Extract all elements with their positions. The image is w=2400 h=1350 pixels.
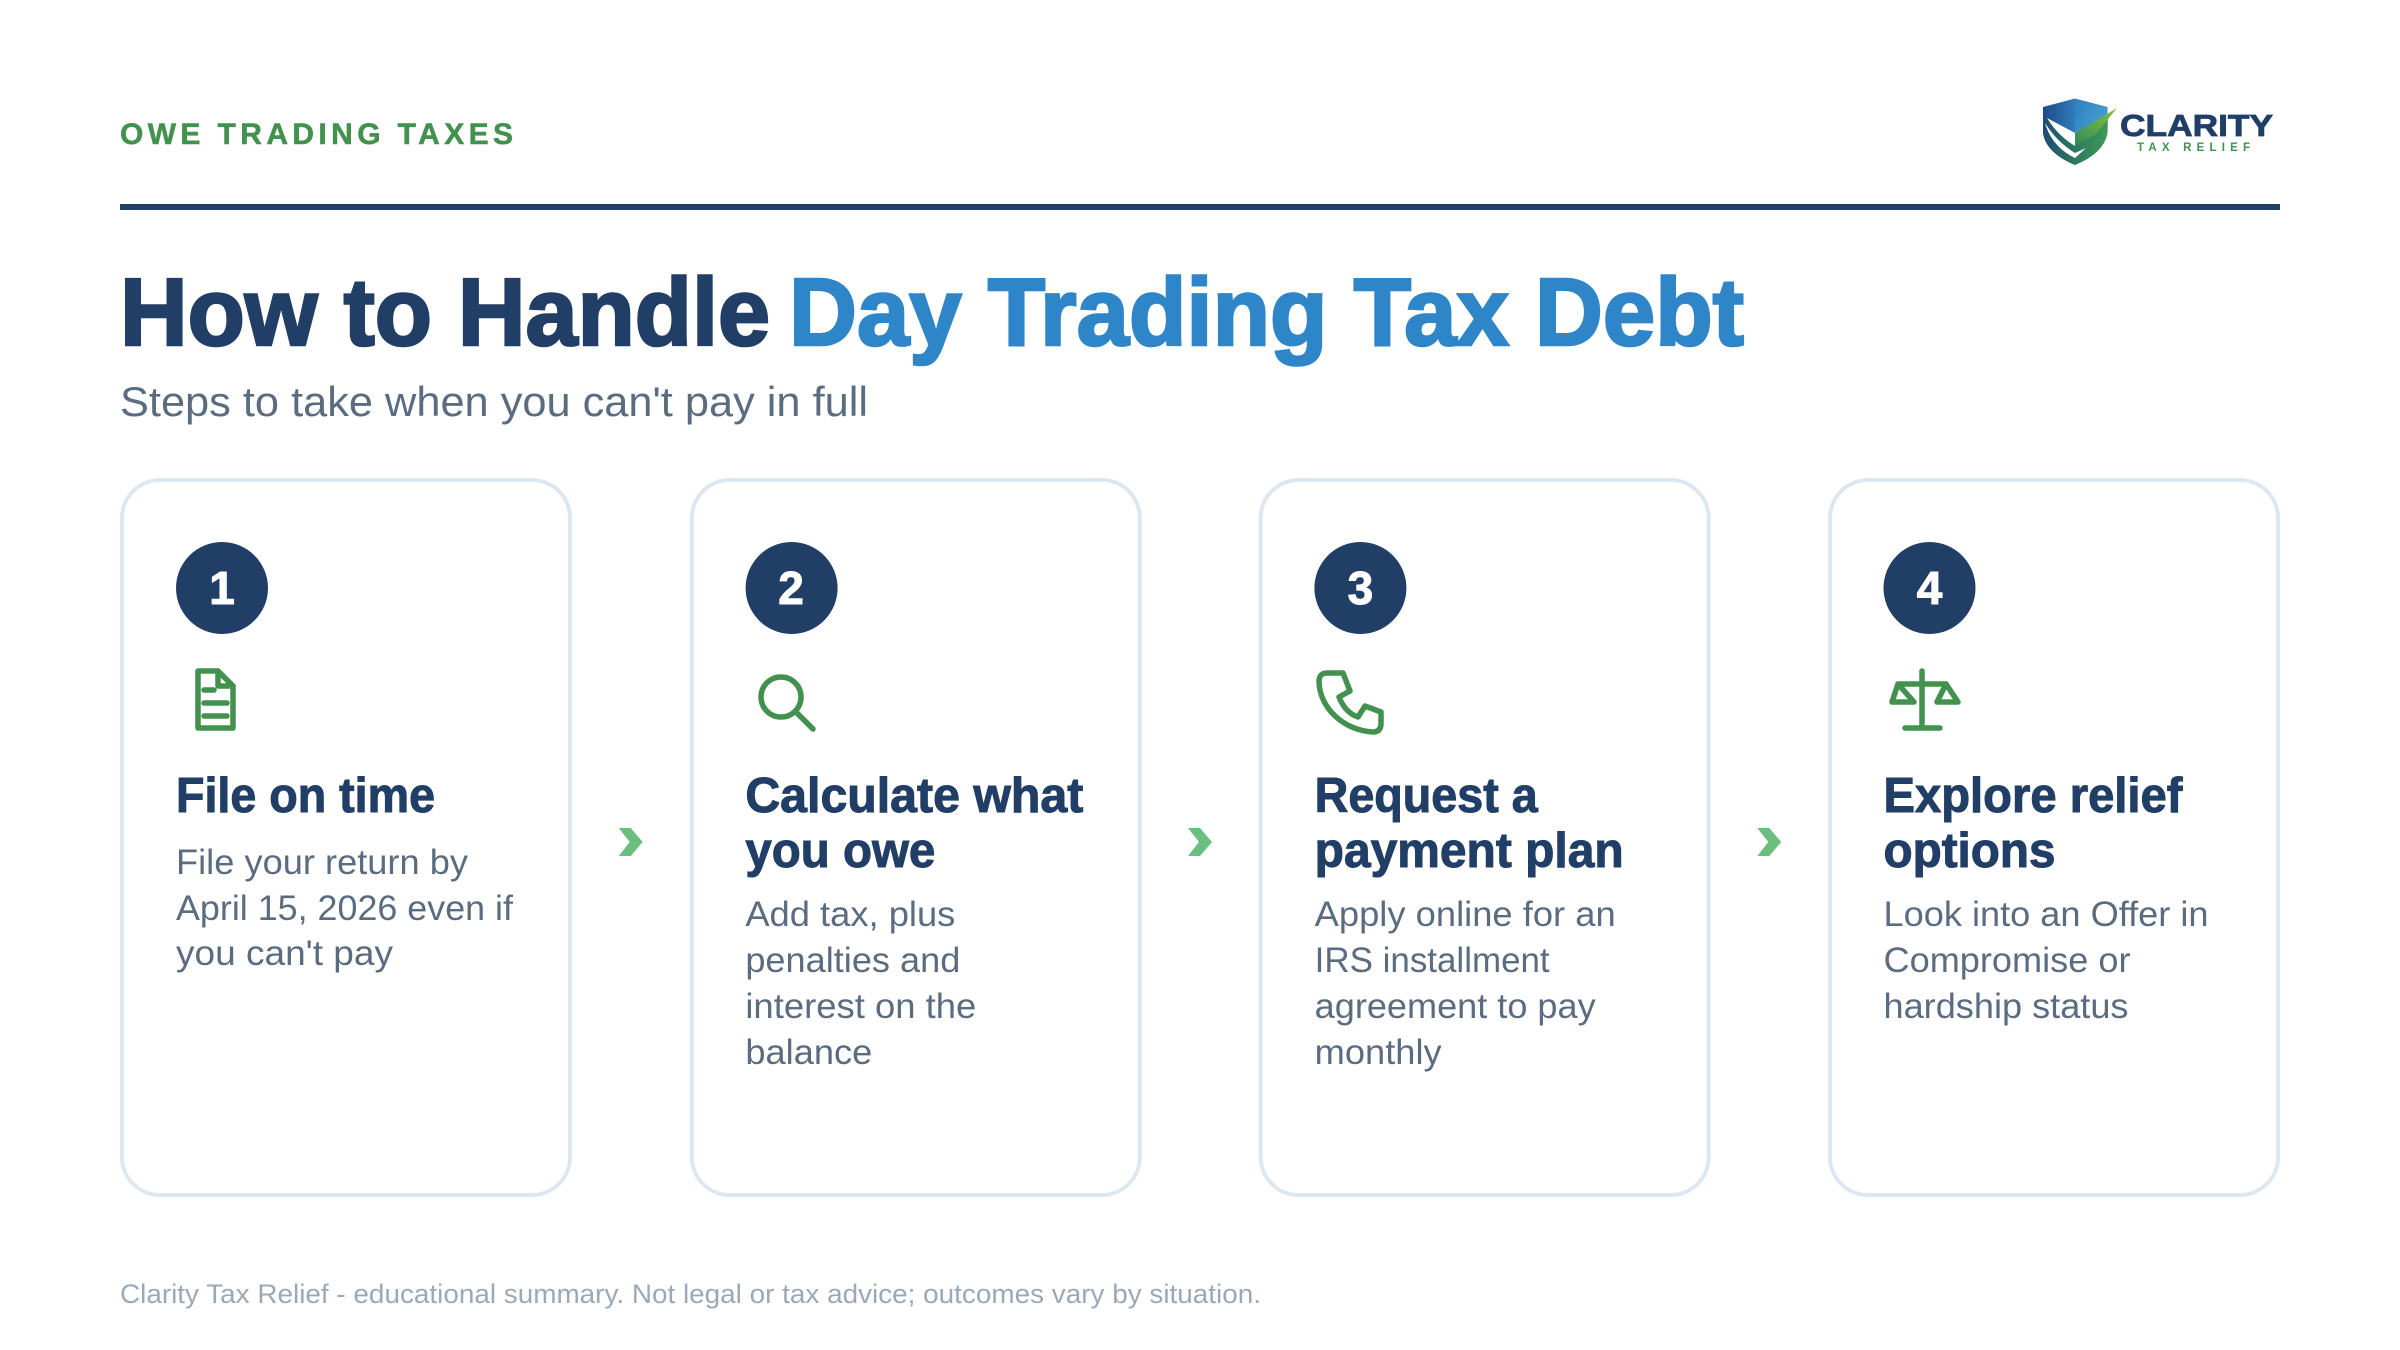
- panel: step 4: [1830, 480, 2278, 1195]
- eyebrow label: OWE TRADING TAXES: [120, 118, 513, 151]
- title: Day Trading Tax Debt: [789, 259, 1744, 366]
- step 4 heading: Explore relief: [1884, 769, 2183, 823]
- step 3 heading: [1315, 769, 1624, 878]
- panel: step 1: [122, 480, 570, 1195]
- step number 4: [1884, 542, 1976, 634]
- step 3 description: monthly: [1315, 1032, 1442, 1072]
- step 4 heading: options: [1884, 824, 2056, 878]
- step number 1: 1: [209, 562, 235, 614]
- step 2 description: [745, 894, 976, 1072]
- step 4 description: [1884, 894, 2208, 1026]
- step number 2: 2: [778, 562, 804, 614]
- step 3 description: agreement to pay: [1315, 986, 1596, 1026]
- step 4 description: Compromise or: [1884, 940, 2131, 980]
- step 1 description: April 15, 2026 even if: [176, 888, 513, 928]
- step number 3: 3: [1348, 562, 1373, 614]
- icon: balance scale: [1892, 671, 1958, 728]
- step 3 heading: payment plan: [1315, 824, 1624, 878]
- icon: phone: [1319, 673, 1381, 732]
- arrow 2: [1188, 828, 1212, 856]
- logo: Clarity Tax Relief: [2043, 98, 2273, 165]
- step 2 heading: Calculate what: [745, 769, 1083, 823]
- step number 3: [1314, 542, 1406, 634]
- step 2 description: Add tax, plus: [745, 894, 955, 934]
- step 2 description: balance: [745, 1032, 872, 1072]
- subtitle: Steps to take when you can't pay in full: [120, 378, 868, 425]
- step 3 description: Apply online for an: [1315, 894, 1616, 934]
- step number 1: [176, 542, 268, 634]
- step 3 heading: Request a: [1315, 769, 1538, 823]
- step 1 description: you can't pay: [176, 933, 393, 973]
- step number 4: 4: [1917, 562, 1943, 614]
- panel: step 3: [1261, 480, 1709, 1195]
- step 1 description: File your return by: [176, 842, 468, 882]
- icon: magnifier: [761, 677, 813, 729]
- logo: Clarity Tax Relief: CLARITY: [2120, 108, 2273, 143]
- step 2 heading: you owe: [745, 824, 935, 878]
- title: [120, 259, 1744, 366]
- header divider: [120, 204, 2280, 210]
- step 4 description: Look into an Offer in: [1884, 894, 2208, 934]
- step number 2: [746, 542, 838, 634]
- step 2 description: penalties and: [745, 940, 960, 980]
- footer disclaimer: Clarity Tax Relief - educational summary. Not legal or tax advice; outcomes vary by situation.: [120, 1279, 1261, 1309]
- step 1 heading: File on time: [176, 769, 435, 823]
- step 4 heading: [1884, 769, 2183, 878]
- title: How to Handle: [120, 259, 770, 366]
- panel: step 2: [692, 480, 1140, 1195]
- icon: document: [198, 671, 233, 728]
- step 2 description: interest on the: [745, 986, 976, 1026]
- arrow 3: [1757, 828, 1781, 856]
- step 1 description: [176, 842, 513, 973]
- step 4 description: hardship status: [1884, 986, 2128, 1026]
- logo: Clarity Tax Relief: TAX RELIEF: [2137, 142, 2250, 154]
- arrow 1: [619, 828, 643, 856]
- step 3 description: [1315, 894, 1616, 1072]
- step 3 description: IRS installment: [1315, 940, 1550, 980]
- step 2 heading: [745, 769, 1083, 878]
